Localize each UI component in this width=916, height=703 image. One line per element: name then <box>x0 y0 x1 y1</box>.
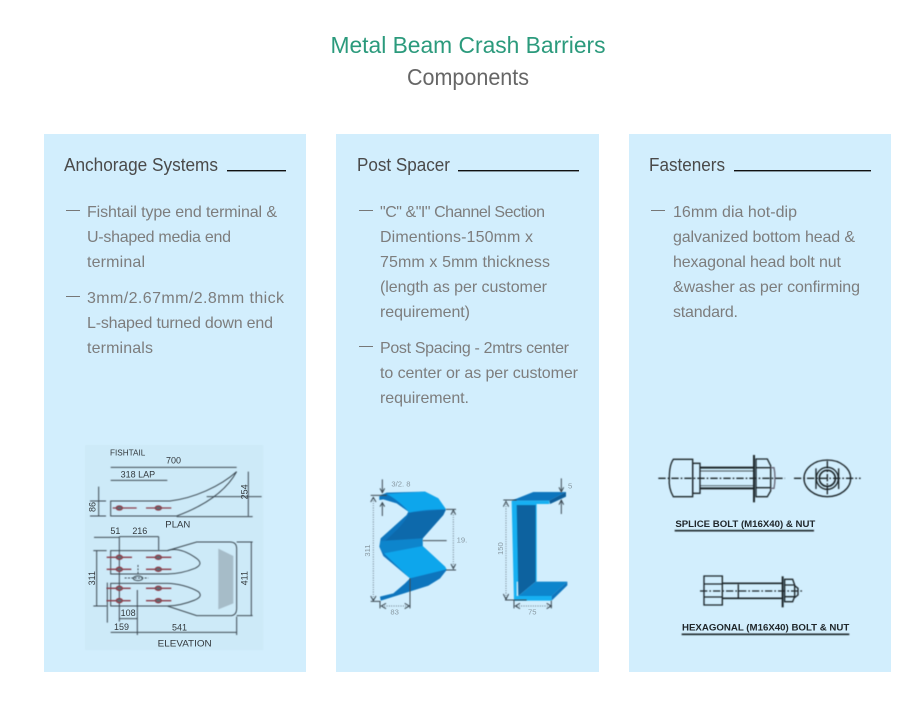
diagram: bolts <box>658 455 861 634</box>
text block: anchorage bullets: Fishtail type end terminal & <box>87 204 277 221</box>
diagram: W-beam profile: 3/2. 8 <box>391 480 410 489</box>
bolt captions <box>675 519 850 633</box>
diagram labels: ELEVATION <box>158 639 212 649</box>
panel: anchorage systems <box>44 134 306 672</box>
text block: post spacer bullets <box>359 204 579 407</box>
text block: anchorage bullets: U-shaped media end <box>87 229 231 246</box>
panel: post spacer <box>336 134 599 672</box>
text block: fasteners bullets: standard. <box>673 304 738 321</box>
text block: anchorage bullets <box>66 204 285 357</box>
text block: post spacer bullets: requirement) <box>380 304 470 321</box>
text block: fasteners bullets: &washer as per confirming <box>673 279 860 296</box>
text block: post spacer bullets: "C" &"I" Channel Section <box>380 204 545 221</box>
diagram labels: 541 <box>172 623 187 633</box>
heading: post spacer: Post Spacer <box>357 155 450 175</box>
diagram labels: 700 <box>166 455 181 465</box>
diagram: W-beam profile: 83 <box>390 608 399 617</box>
diagram: W-beam profile: 19. <box>457 536 467 545</box>
diagram: C channel profile: 75 <box>528 608 537 617</box>
text block: post spacer bullets: requirement. <box>380 390 469 407</box>
bolt captions: SPLICE BOLT (M16X40) & NUT <box>675 519 816 529</box>
diagram labels: 254 <box>240 484 250 499</box>
diagram labels: FISHTAIL <box>110 447 146 457</box>
text block: fasteners bullets: hexagonal head bolt nut <box>673 254 842 271</box>
text block: anchorage bullets: L-shaped turned down end <box>87 315 273 332</box>
diagram: fishtail end terminal <box>85 445 263 650</box>
diagram: W-beam profile <box>363 479 467 617</box>
diagram labels: 159 <box>114 622 129 632</box>
text block: fasteners bullets: 16mm dia hot-dip <box>673 204 797 221</box>
text block: post spacer bullets: Post Spacing - 2mtrs center <box>380 340 570 357</box>
text block: post spacer bullets: to center or as per customer <box>380 365 579 382</box>
diagram labels: PLAN <box>165 520 190 530</box>
text block: anchorage bullets: terminal <box>87 254 145 271</box>
text block: anchorage bullets: terminals <box>87 340 153 357</box>
text block: fasteners bullets <box>651 204 860 321</box>
text block: post spacer bullets: (length as per customer <box>380 279 548 296</box>
panel: fasteners <box>629 134 891 672</box>
title: Metal Beam Crash Barriers <box>330 32 606 58</box>
title <box>330 32 606 90</box>
diagram: W-beam profile: 311 <box>363 544 372 557</box>
text block: fasteners bullets: galvanized bottom head & <box>673 229 855 246</box>
diagram labels: 318 LAP <box>121 469 155 479</box>
diagram labels: 86 <box>88 502 98 512</box>
diagram labels: 411 <box>239 571 249 585</box>
diagram labels <box>87 447 250 649</box>
text block: post spacer bullets: Dimentions-150mm x <box>380 229 533 246</box>
bolt captions: HEXAGONAL (M16X40) BOLT & NUT <box>682 623 850 633</box>
diagram: C channel profile: 5 <box>568 482 572 491</box>
diagram: C channel profile: 150 <box>496 542 505 555</box>
diagram: C channel profile <box>496 478 572 617</box>
diagram labels: 311 <box>87 571 97 585</box>
diagram labels: 108 <box>121 608 136 618</box>
heading: fasteners: Fasteners <box>649 155 725 175</box>
diagram labels: 51 <box>110 526 120 536</box>
diagram labels: 216 <box>132 526 147 536</box>
text block: post spacer bullets: 75mm x 5mm thickness <box>380 254 550 271</box>
title: Components <box>407 64 529 90</box>
heading: anchorage systems: Anchorage Systems <box>64 155 218 175</box>
text block: anchorage bullets: 3mm/2.67mm/2.8mm thick <box>87 290 285 307</box>
